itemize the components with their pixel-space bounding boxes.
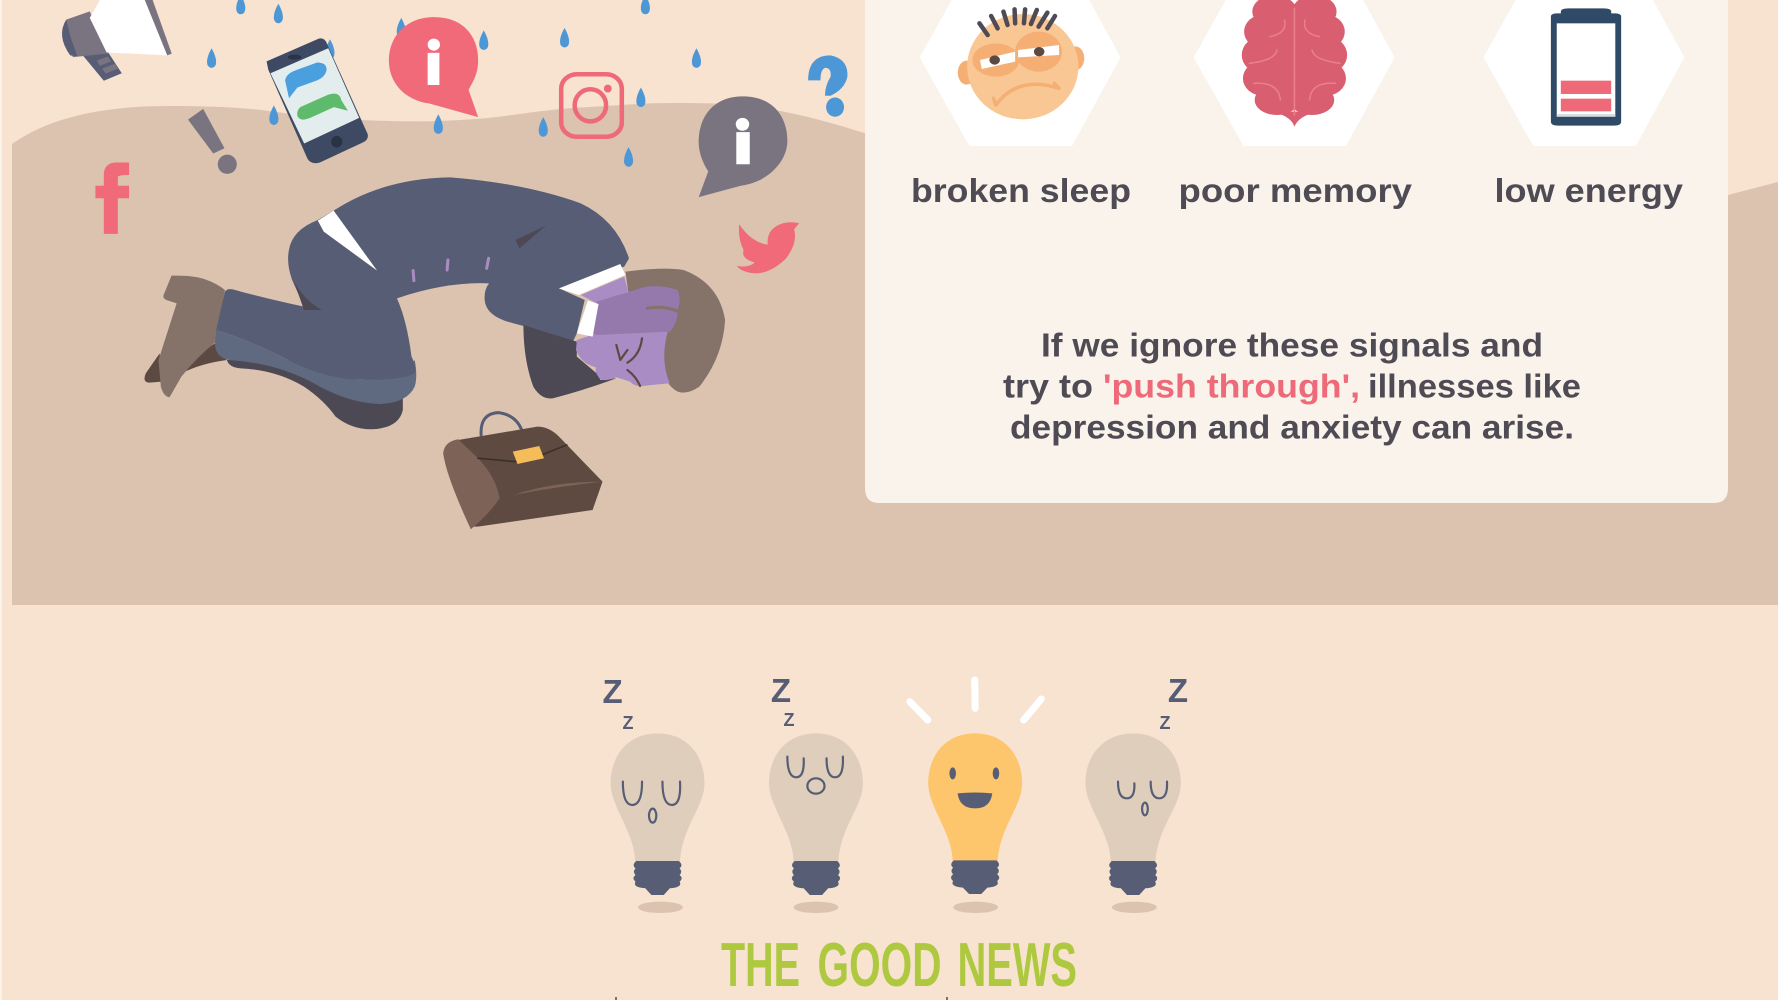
heading: the good news: THE [721,931,800,1000]
sleeping Z marks: Z [1160,713,1170,733]
icon: megaphone [62,0,172,81]
hair [625,269,725,393]
social media and notification icons [62,0,847,273]
suit body [216,177,629,380]
bulb 2 asleep [769,733,863,913]
icon: brain in hexagon [1194,0,1395,146]
sand wave ground [12,103,1778,605]
label: low energy: low energy [1494,173,1683,210]
rear shoe [144,343,227,383]
illustration: businessman curled up [144,177,725,529]
belt marks [413,258,489,281]
warning text block: If we ignore these signals and [1041,328,1543,364]
leg shadow [227,360,403,429]
closed eyes [616,338,642,386]
sleeping Z marks: Z [771,672,791,709]
heading: the good news: GOOD [818,931,942,1000]
icon: pink info bubble [389,17,478,117]
left edge strip [0,0,2,1000]
trouser fold [215,330,416,404]
bulb 1 asleep [611,733,705,913]
warning text block: try to [1003,368,1093,406]
front shoe [158,276,225,397]
sleeping Z marks [603,672,1188,733]
collar shadow [523,325,616,398]
icon: smartphone [267,38,368,163]
briefcase [443,413,603,529]
label: broken sleep: broken sleep [911,173,1131,210]
icon: facebook [95,162,129,234]
warning text block [1003,328,1581,446]
knee shadow [294,282,322,310]
icon: low battery in hexagon [1484,0,1684,146]
bulb 4 asleep [1085,733,1181,913]
face [576,332,670,386]
front hand [593,286,680,335]
sleeping Z marks: Z [622,713,634,733]
clipped next line marks [616,997,947,1000]
panel: warning signs [865,0,1728,503]
sleeping Z marks: Z [603,673,623,710]
elbow crease [516,226,546,248]
shirt cuffs [559,264,625,337]
warning text block: illnesses like [1368,368,1581,406]
icon: exclamation mark [188,109,237,174]
icon: tired face in hexagon [920,0,1121,146]
panel background [865,0,1728,503]
rear hand [581,277,628,303]
shirt tail [318,211,377,271]
icon: grey info bubble [699,96,787,197]
heading: the good news: NEWS [958,931,1077,1000]
icon: question mark [808,55,847,117]
bulb 3 awake [910,680,1041,913]
sleeping Z marks: Z [1168,672,1188,709]
icon: twitter bird [737,222,799,273]
warning text block: 'push through', [1103,368,1360,406]
warning text block: depression and anxiety can arise. [1010,410,1574,446]
finger line [647,307,679,312]
heading: the good news [721,931,1077,1000]
sleeping Z marks: Z [784,710,794,730]
light bulbs row [611,680,1181,913]
rain drops [207,0,701,167]
icon: instagram [561,74,622,137]
label: poor memory: poor memory [1178,173,1412,210]
